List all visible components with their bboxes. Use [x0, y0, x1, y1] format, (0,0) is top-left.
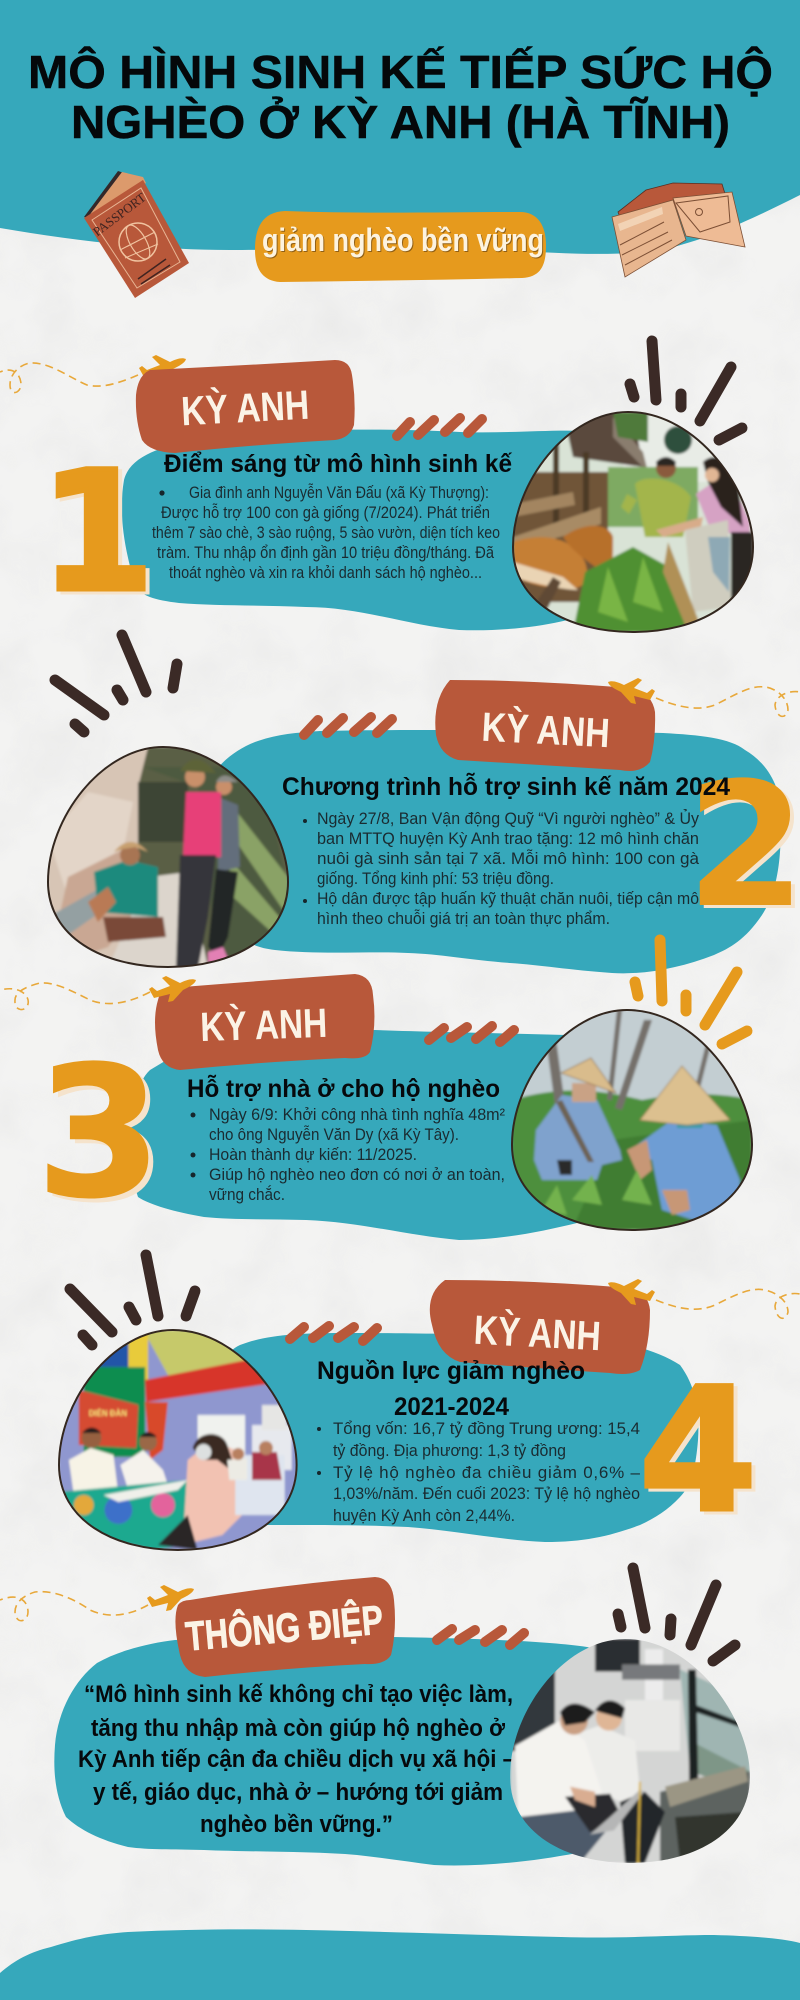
body text: ban MTTQ huyện Kỳ Anh trao tặng: 12 mô hình chăn [317, 830, 699, 848]
body text: tràm. Thu nhập ổn định gần 10 triệu đồng/tháng. Đã [157, 544, 495, 562]
body text: Giúp hộ nghèo neo đơn có nơi ở an toàn, [209, 1166, 505, 1184]
heading [317, 1357, 585, 1421]
quote text [78, 1681, 515, 1838]
body text: 1,03%/năm. Đến cuối 2023: Tỷ lệ hộ nghèo [333, 1484, 640, 1503]
quote text: “Mô hình sinh kế không chỉ tạo việc làm, [84, 1681, 513, 1708]
icon: wallet [612, 183, 745, 277]
tag: Kỳ Anh: KỲ ANH [180, 382, 310, 434]
photo: community meeting [59, 1330, 297, 1550]
quote text: y tế, giáo dục, nhà ở – hướng tới giảm [93, 1779, 503, 1806]
title: NGHÈO Ở KỲ ANH (HÀ TĨNH) [71, 96, 730, 148]
decorative strokes [437, 1629, 524, 1645]
body text: vững chắc. [209, 1185, 285, 1204]
body text [303, 809, 700, 928]
section 4 [59, 1255, 800, 1554]
body text: hình theo chuỗi giá trị an toàn thực phẩm. [317, 909, 610, 928]
decorative strokes [304, 717, 392, 735]
body text: cho ông Nguyễn Văn Dy (xã Kỳ Tây). [209, 1125, 459, 1144]
body text: thêm 7 sào chè, 3 sào ruộng, 5 sào vườn, diện tích keo [152, 524, 500, 542]
heading: 2021-2024 [394, 1393, 509, 1421]
body text: huyện Kỳ Anh còn 2,44%. [333, 1506, 515, 1525]
body text: Ngày 27/8, Ban Vận động Quỹ “Vì người nghèo” & Ủy [317, 809, 700, 828]
icon: passport [84, 171, 189, 298]
body text [152, 483, 500, 582]
travel trail [0, 363, 138, 393]
section 3 [0, 940, 752, 1242]
number 3: 3 [41, 1033, 167, 1242]
body text: Được hỗ trợ 100 con gà giống (7/2024). Phát triển [161, 503, 490, 522]
heading: Chương trình hỗ trợ sinh kế năm 2024 [282, 771, 730, 801]
rays [635, 940, 747, 1044]
tag: Kỳ Anh: KỲ ANH [473, 1307, 602, 1359]
body text: Ngày 6/9: Khởi công nhà tình nghĩa 48m² [209, 1106, 505, 1124]
number 1: 1 [44, 439, 158, 631]
tag: Kỳ Anh: KỲ ANH [199, 1000, 328, 1050]
body text: tỷ đồng. Địa phương: 1,3 tỷ đồng [333, 1441, 566, 1460]
number 1: 1 [40, 436, 154, 628]
travel trail [656, 1289, 800, 1318]
body text [317, 1419, 641, 1525]
body text [190, 1106, 505, 1204]
heading: Nguồn lực giảm nghèo [317, 1357, 585, 1385]
panel: teal blob 1 [122, 430, 600, 630]
tag: Kỳ Anh [136, 360, 355, 453]
section 1 [0, 341, 753, 632]
heading: Điểm sáng từ mô hình sinh kế [164, 450, 512, 478]
quote text: tăng thu nhập mà còn giúp hộ nghèo ở [91, 1715, 506, 1742]
panel: teal blob 5 [54, 1636, 600, 1865]
travel trail [0, 983, 150, 1010]
rays [70, 1255, 195, 1345]
body text: giống. Tổng kinh phí: 53 triệu đồng. [317, 870, 554, 888]
icon: plane [147, 1585, 194, 1611]
body text: Tổng vốn: 16,7 tỷ đồng Trung ương: 15,4 [333, 1419, 640, 1438]
rays [618, 1568, 735, 1661]
heading: Hỗ trợ nhà ở cho hộ nghèo [187, 1073, 500, 1103]
travel trail [0, 1592, 148, 1621]
subtitle pill: giảm nghèo bền vững [263, 223, 545, 259]
rays [55, 635, 177, 732]
body text: thoát nghèo và xin ra khỏi danh sách hộ nghèo... [169, 564, 482, 582]
tag: Kỳ Anh [155, 974, 374, 1070]
bottom teal shape [0, 1929, 800, 2000]
number 4: 4 [642, 1353, 762, 1554]
panel: teal blob 4 [210, 1333, 698, 1542]
quote text: Kỳ Anh tiếp cận đa chiều dịch vụ xã hội – [78, 1746, 515, 1773]
icon: plane [608, 678, 655, 704]
body text: Tỷ lệ hộ nghèo đa chiều giảm 0,6% – [333, 1463, 641, 1482]
icon: plane [608, 1279, 655, 1305]
decorative strokes [429, 1026, 514, 1042]
photo: chicken farm [48, 747, 288, 968]
body text: Hoàn thành dự kiến: 11/2025. [209, 1146, 417, 1164]
tag: Kỳ Anh [435, 680, 655, 771]
rays [630, 341, 742, 440]
number 4: 4 [638, 1350, 758, 1551]
icon: plane [139, 355, 186, 381]
tag: Kỳ Anh: KỲ ANH [481, 704, 611, 756]
icon: passport: PASSPORT [90, 190, 149, 239]
top teal header shape [0, 0, 800, 254]
tag: Thông điệp [175, 1577, 395, 1677]
photo: tea pickers [512, 1010, 752, 1230]
tag: Thông điệp: THÔNG ĐIỆP [184, 1597, 385, 1660]
panel: teal blob 3 [130, 1030, 600, 1240]
travel trail [656, 687, 800, 716]
panel: teal blob 2 [200, 730, 781, 973]
quote text: nghèo bền vững.” [200, 1811, 393, 1838]
title [28, 46, 773, 148]
subtitle pill [255, 211, 546, 282]
decorative strokes [290, 1326, 377, 1341]
photo: farmers feeding cows [513, 412, 753, 632]
body text: Hộ dân được tập huấn kỹ thuật chăn nuôi, tiếp cận mô [317, 890, 699, 908]
section 5: message [0, 1568, 750, 1865]
section 2 [48, 635, 800, 973]
icon: plane [149, 976, 196, 1002]
photo: community meeting: DIỄN ĐÀN [89, 1409, 127, 1418]
decorative strokes [397, 418, 482, 436]
tag: Kỳ Anh [430, 1280, 650, 1374]
body text: nuôi gà sinh sản tại 7 xã. Mỗi mô hình: 100 con gà [317, 849, 700, 868]
body text: Gia đình anh Nguyễn Văn Đấu (xã Kỳ Thượng): [189, 483, 489, 502]
photo: lab researchers [510, 1639, 750, 1863]
subtitle pill: giảm nghèo bền vững [262, 222, 544, 258]
title: MÔ HÌNH SINH KẾ TIẾP SỨC HỘ [28, 46, 773, 98]
number 3: 3 [36, 1029, 162, 1238]
